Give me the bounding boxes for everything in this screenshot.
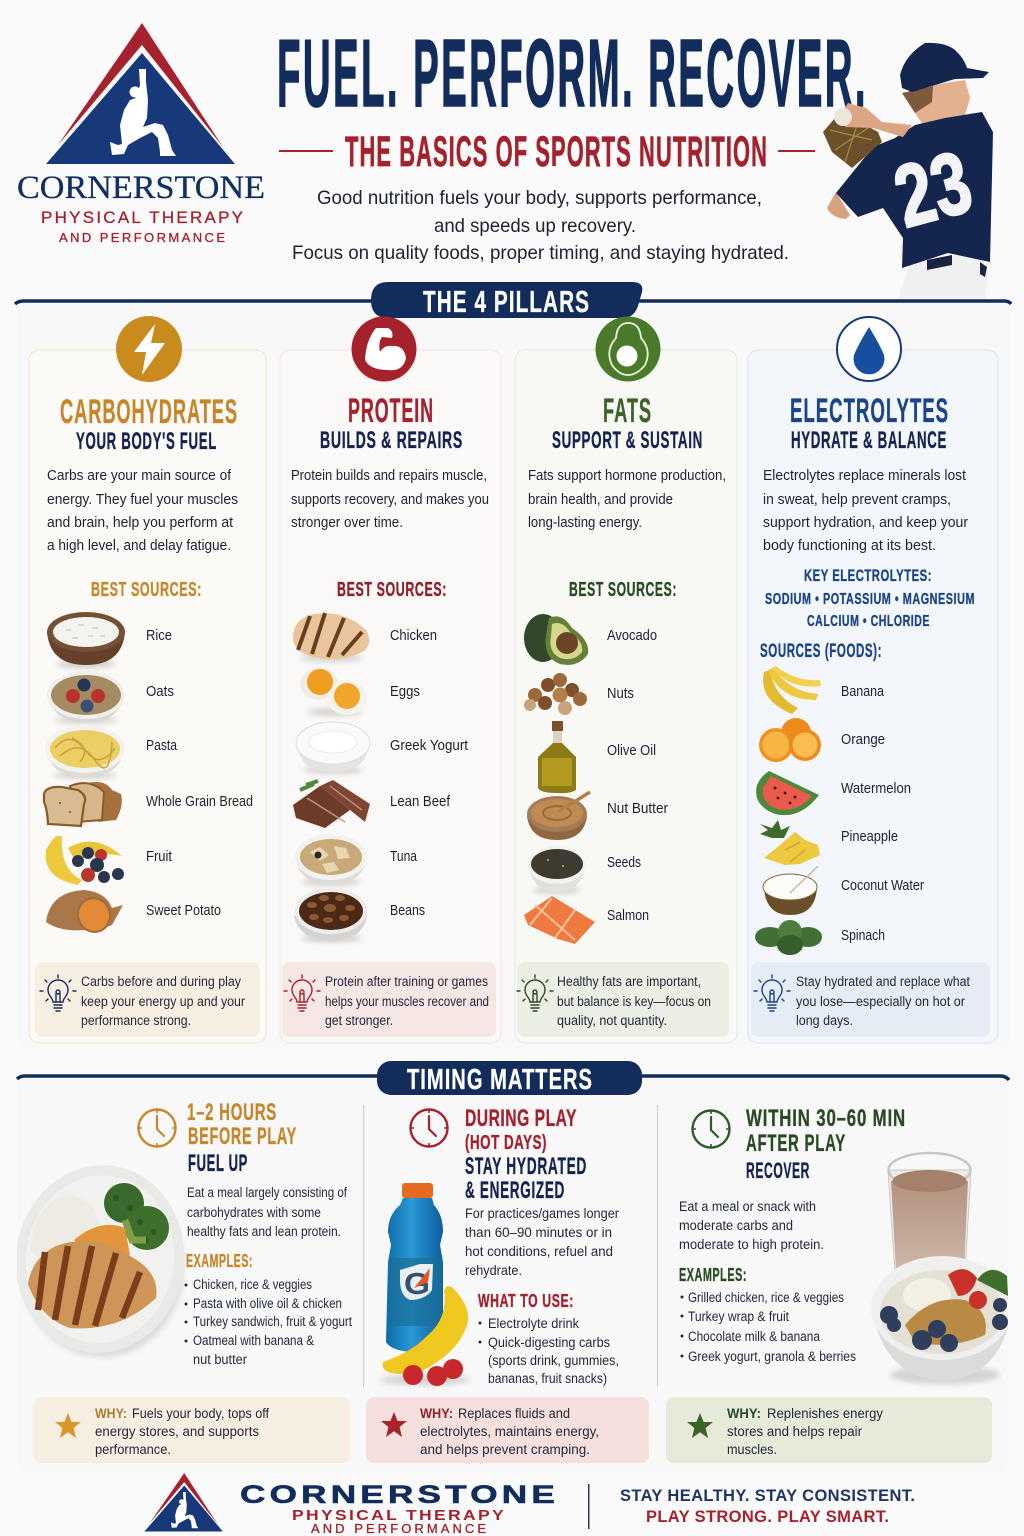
image: chocolate milk glass xyxy=(888,1153,971,1272)
food: oats: Oats xyxy=(146,684,174,700)
icon: star xyxy=(55,1413,81,1438)
heading fats: FATS xyxy=(603,392,652,430)
food: pasta xyxy=(45,725,178,779)
subheading: RECOVER xyxy=(746,1158,810,1183)
image: chicken plate xyxy=(17,1165,185,1359)
what to use list: Electrolyte drink xyxy=(488,1316,579,1331)
icon: clock xyxy=(692,1110,730,1148)
description: supports recovery, and makes you xyxy=(291,492,489,508)
food: fruit: Fruit xyxy=(146,849,172,865)
description xyxy=(187,1185,347,1239)
why box: before play: energy stores, and supports xyxy=(95,1424,259,1439)
examples list: nut butter xyxy=(193,1352,247,1367)
footer wordmark: CORNERSTONE xyxy=(240,1481,559,1509)
food: tuna xyxy=(295,834,418,886)
description: Eat a meal or snack with xyxy=(679,1199,816,1214)
food: avocado: Avocado xyxy=(607,628,657,644)
food: sweet potato: Sweet Potato xyxy=(146,903,221,919)
tip box: get stronger. xyxy=(325,1013,393,1028)
food: coconut water xyxy=(763,866,924,915)
icon: flexed arm xyxy=(352,316,416,382)
food: salmon: Salmon xyxy=(607,908,649,924)
panel: carbohydrates xyxy=(29,316,266,1043)
what to use list xyxy=(478,1316,619,1386)
food: beans xyxy=(294,888,425,942)
food: banana xyxy=(763,666,885,714)
what to use list: bananas, fruit snacks) xyxy=(488,1371,607,1386)
subheading: FUEL UP xyxy=(188,1150,248,1177)
food: bread xyxy=(44,782,253,826)
heading: AFTER PLAY xyxy=(746,1130,846,1157)
heading xyxy=(746,1105,906,1157)
food: seeds xyxy=(528,846,641,894)
icon: clock xyxy=(410,1110,448,1146)
icon: lightbulb xyxy=(284,975,320,1011)
tip box: helps your muscles recover and xyxy=(325,994,489,1009)
examples list: Pasta with olive oil & chicken xyxy=(193,1296,342,1311)
jersey number: 23 xyxy=(884,132,981,246)
icon: lightbulb xyxy=(40,975,76,1011)
why box: during play: and helps prevent cramping. xyxy=(420,1442,590,1457)
what to use heading: WHAT TO USE: xyxy=(478,1291,574,1311)
description: rehydrate. xyxy=(465,1263,522,1278)
heading: DURING PLAY xyxy=(465,1105,577,1132)
description: and brain, help you perform at xyxy=(47,515,233,531)
description xyxy=(679,1199,824,1252)
food: nut butter: Nut Butter xyxy=(607,801,668,817)
description: hot conditions, refuel and xyxy=(465,1244,613,1259)
food: oats xyxy=(47,671,174,724)
examples heading: EXAMPLES: xyxy=(679,1265,747,1285)
heading carbohydrates: CARBOHYDRATES xyxy=(60,393,238,431)
heading: (HOT DAYS) xyxy=(465,1132,547,1154)
intro text xyxy=(292,187,789,264)
tip box xyxy=(517,962,729,1037)
footer logo mark xyxy=(144,1473,223,1532)
what to use list: Quick-digesting carbs xyxy=(488,1335,610,1350)
key electrolytes: CALCIUM • CHLORIDE xyxy=(807,613,930,630)
food: bread: Whole Grain Bread xyxy=(146,794,253,810)
panel: electrolytes xyxy=(748,317,998,1043)
food: nuts: Nuts xyxy=(607,686,634,702)
subheading: YOUR BODY'S FUEL xyxy=(76,428,217,455)
intro text: Good nutrition fuels your body, supports performance, xyxy=(317,187,762,209)
food: pineapple: Pineapple xyxy=(841,829,898,845)
description: brain health, and provide xyxy=(528,492,673,508)
examples heading: EXAMPLES: xyxy=(186,1251,253,1271)
food: chicken: Chicken xyxy=(390,628,437,644)
description xyxy=(291,468,489,531)
description: Carbs are your main source of xyxy=(47,468,232,484)
tip box xyxy=(751,962,990,1037)
why box: after play: WHY: xyxy=(727,1406,761,1421)
heading xyxy=(187,1099,297,1150)
description xyxy=(763,468,968,554)
food: salmon xyxy=(524,896,649,944)
examples list: Chocolate milk & banana xyxy=(688,1329,820,1344)
examples list: Grilled chicken, rice & veggies xyxy=(688,1290,844,1305)
heading: 1–2 HOURS xyxy=(187,1099,277,1126)
best sources heading: BEST SOURCES: xyxy=(569,579,677,601)
image: sports drink and banana: G xyxy=(404,1266,430,1301)
icon: water drop xyxy=(837,317,901,381)
description xyxy=(465,1206,619,1278)
description: support hydration, and keep your xyxy=(763,515,968,531)
description: moderate to high protein. xyxy=(679,1237,824,1252)
footer tagline: PLAY STRONG. PLAY SMART. xyxy=(646,1508,889,1526)
description xyxy=(47,468,238,554)
heading protein: PROTEIN xyxy=(348,392,434,430)
subheading xyxy=(465,1153,587,1204)
description: than 60–90 minutes or in xyxy=(465,1225,612,1240)
why box: before play: performance. xyxy=(95,1442,171,1457)
description: carbohydrates with some xyxy=(187,1205,321,1220)
food: pineapple xyxy=(760,820,898,865)
key electrolytes xyxy=(765,566,975,630)
tip box xyxy=(35,962,260,1037)
tip box: quality, not quantity. xyxy=(557,1013,667,1028)
logo wordmark: CORNERSTONE xyxy=(17,170,265,206)
column: during play xyxy=(380,1105,619,1386)
why box: after play xyxy=(666,1397,992,1463)
description: Protein builds and repairs muscle, xyxy=(291,468,487,484)
examples list: Turkey wrap & fruit xyxy=(688,1309,789,1324)
column: before play xyxy=(4,1099,352,1367)
logo subline: PHYSICAL THERAPY xyxy=(41,208,243,227)
food: pasta: Pasta xyxy=(146,738,178,754)
tip box: long days. xyxy=(796,1013,853,1028)
column: after play xyxy=(679,1105,1013,1384)
food: yogurt xyxy=(296,722,468,774)
food: lean beef xyxy=(293,780,451,828)
tip box: you lose—especially on hot or xyxy=(796,994,965,1009)
section: the 4 pillars xyxy=(15,282,1011,1048)
section: timing matters xyxy=(17,1061,1009,1473)
footer subline: PHYSICAL THERAPY xyxy=(292,1507,506,1524)
food: spinach xyxy=(755,920,885,955)
tip box: Healthy fats are important, xyxy=(557,974,701,989)
icon: lightbulb xyxy=(754,975,790,1011)
intro text: Focus on quality foods, proper timing, and staying hydrated. xyxy=(292,242,789,264)
heading: WITHIN 30–60 MIN xyxy=(746,1105,906,1132)
food: watermelon xyxy=(756,771,911,815)
heading: BEFORE PLAY xyxy=(188,1123,297,1150)
icon: star xyxy=(687,1413,713,1438)
food: coconut water: Coconut Water xyxy=(841,878,924,894)
subheading: BUILDS & REPAIRS xyxy=(320,427,463,454)
why box: after play: stores and helps repair xyxy=(727,1424,862,1439)
subheading: & ENERGIZED xyxy=(465,1177,565,1204)
why box: before play xyxy=(33,1397,350,1463)
food: watermelon: Watermelon xyxy=(841,781,911,797)
food: olive oil: Olive Oil xyxy=(607,743,656,759)
best sources heading: BEST SOURCES: xyxy=(337,579,447,601)
baseball pitcher xyxy=(823,43,993,300)
food: nuts xyxy=(524,673,634,715)
why box: after play: muscles. xyxy=(727,1442,777,1457)
examples list xyxy=(184,1277,352,1367)
key electrolytes: KEY ELECTROLYTES: xyxy=(804,566,932,585)
description: body functioning at its best. xyxy=(763,538,936,554)
examples list: Oatmeal with banana & xyxy=(193,1333,314,1348)
examples list: Turkey sandwich, fruit & yogurt xyxy=(193,1314,352,1329)
description: Fats support hormone production, xyxy=(528,468,726,484)
what to use list: (sports drink, gummies, xyxy=(488,1353,619,1368)
food: rice: Rice xyxy=(146,628,172,644)
tip box: Stay hydrated and replace what xyxy=(796,974,970,989)
food: lean beef: Lean Beef xyxy=(390,794,451,810)
intro text: and speeds up recovery. xyxy=(434,215,636,237)
food: avocado xyxy=(524,614,657,665)
header logo xyxy=(17,23,265,245)
panel: fats xyxy=(515,316,737,1043)
food: chicken xyxy=(293,613,437,662)
tip box: Protein after training or games xyxy=(325,974,488,989)
why box: before play: WHY: xyxy=(95,1406,127,1421)
food: olive oil xyxy=(538,721,656,793)
heading xyxy=(465,1105,577,1154)
tip box: performance strong. xyxy=(81,1013,191,1028)
food: beans: Beans xyxy=(390,903,425,919)
panel: protein xyxy=(280,316,501,1043)
food: spinach: Spinach xyxy=(841,928,885,944)
food: tuna: Tuna xyxy=(390,849,418,865)
description: For practices/games longer xyxy=(465,1206,619,1221)
footer tagline: STAY HEALTHY. STAY CONSISTENT. xyxy=(620,1487,915,1505)
image: yogurt bowl xyxy=(871,1256,1013,1384)
image: sports drink and banana xyxy=(380,1183,470,1386)
tip box xyxy=(282,962,496,1037)
tip box: Carbs before and during play xyxy=(81,974,241,989)
why box: during play: WHY: xyxy=(420,1406,453,1421)
footer subline two: AND PERFORMANCE xyxy=(311,1521,486,1536)
subheading: SUPPORT & SUSTAIN xyxy=(552,427,703,454)
food: banana: Banana xyxy=(841,684,885,700)
description: healthy fats and lean protein. xyxy=(187,1224,341,1239)
logo triangle mark xyxy=(46,23,235,164)
icon: star xyxy=(381,1412,407,1437)
description: Eat a meal largely consisting of xyxy=(187,1185,347,1200)
icon: avocado xyxy=(596,316,660,382)
why box: before play: Fuels your body, tops off xyxy=(132,1406,269,1421)
subheading: STAY HYDRATED xyxy=(465,1153,587,1180)
footer tagline xyxy=(620,1487,915,1526)
food: rice xyxy=(47,612,172,668)
description: Electrolytes replace minerals lost xyxy=(763,468,966,484)
tip box: but balance is key—focus on xyxy=(557,994,711,1009)
footer xyxy=(144,1473,915,1536)
logo subline two: AND PERFORMANCE xyxy=(59,230,225,245)
description: in sweat, help prevent cramps, xyxy=(763,492,951,508)
examples list xyxy=(680,1290,856,1364)
food: fruit xyxy=(46,836,172,885)
food: sweet potato xyxy=(46,890,221,936)
icon: lightbulb xyxy=(517,975,553,1011)
description: stronger over time. xyxy=(291,515,403,531)
why box: during play: Replaces fluids and xyxy=(458,1406,570,1421)
examples list: Greek yogurt, granola & berries xyxy=(688,1349,856,1364)
icon: lightning bolt xyxy=(116,316,182,382)
why box: after play: Replenishes energy xyxy=(767,1406,883,1421)
food: eggs xyxy=(300,668,420,716)
tip box: keep your energy up and your xyxy=(81,994,245,1009)
food: seeds: Seeds xyxy=(607,855,641,871)
food: nut butter xyxy=(527,792,668,840)
icon: clock xyxy=(138,1110,176,1146)
section heading pill: THE 4 PILLARS xyxy=(423,284,590,319)
description: moderate carbs and xyxy=(679,1218,793,1233)
section heading pill: TIMING MATTERS xyxy=(407,1064,593,1096)
food: eggs: Eggs xyxy=(390,684,420,700)
food: orange xyxy=(759,718,885,762)
sources heading: SOURCES (FOODS): xyxy=(760,641,882,662)
description: energy. They fuel your muscles xyxy=(47,492,238,508)
why box: during play xyxy=(366,1397,649,1463)
section heading pill xyxy=(371,282,642,319)
description xyxy=(528,468,726,531)
examples list: Chicken, rice & veggies xyxy=(193,1277,312,1292)
description: long-lasting energy. xyxy=(528,515,642,531)
why box: during play: electrolytes, maintains energy, xyxy=(420,1424,599,1439)
food: orange: Orange xyxy=(841,732,885,748)
best sources heading: BEST SOURCES: xyxy=(91,579,202,601)
food: yogurt: Greek Yogurt xyxy=(390,738,468,754)
description: a high level, and delay fatigue. xyxy=(47,538,231,554)
